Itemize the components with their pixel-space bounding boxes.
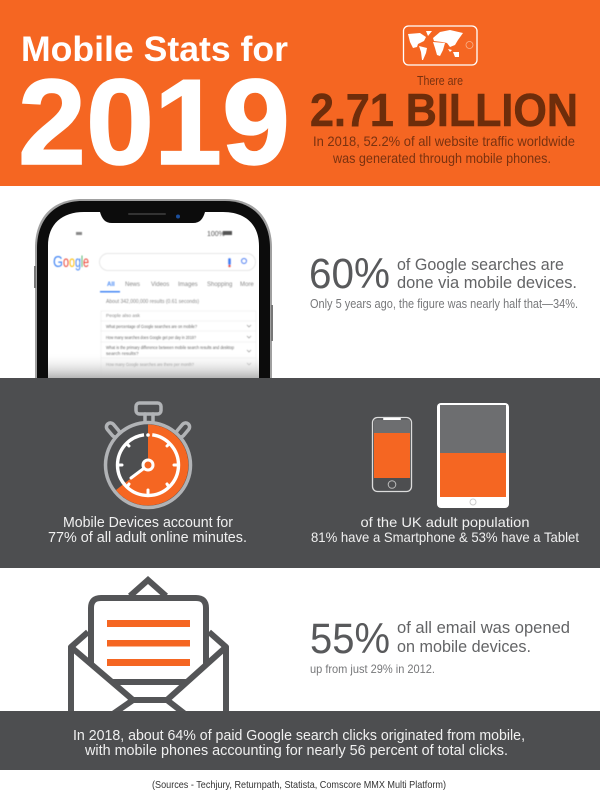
icon: smartphone (372, 418, 412, 492)
search box (100, 254, 256, 270)
text: paid search statistic: In 2018, about 64% of paid Google search clicks originated from mobile, (73, 728, 525, 744)
google logo: G (53, 254, 63, 271)
google logo (53, 254, 89, 271)
text: sources: (Sources - Techjury, Returnpath, Statista, Comscore MMX Multi Platform) (152, 779, 446, 791)
people also ask (101, 311, 256, 378)
stat: 60 percent: 60% (309, 250, 390, 298)
people also ask: What percentage of Google searches are on mobile? (106, 324, 197, 330)
text: uk adult population: of the UK adult population (360, 514, 530, 530)
people also ask: How many Google searches are there per month? (106, 362, 194, 368)
google logo: g (75, 254, 81, 271)
icon: world map on phone (404, 26, 477, 65)
text: website traffic (313, 133, 575, 166)
tabs: Shopping (207, 282, 232, 288)
google logo: l (81, 254, 83, 271)
tabs: News (125, 282, 140, 288)
stat: 55 percent: 55% (310, 615, 390, 663)
tabs: More (240, 282, 254, 288)
google logo: o (63, 254, 69, 271)
text: there are: There are (417, 74, 463, 88)
text: google searches: done via mobile devices. (397, 273, 577, 292)
google screen (53, 231, 256, 378)
google logo: o (69, 254, 75, 271)
icon: envelope (71, 580, 226, 714)
panel: google search on phone (34, 199, 578, 378)
tabs (107, 282, 254, 288)
people also ask: search results? (106, 351, 139, 357)
text: email opened (397, 619, 570, 656)
text: up from 29 percent: up from just 29% in 2012. (310, 662, 435, 676)
text: paid search statistic (73, 728, 525, 759)
text: website traffic: was generated through mobile phones. (332, 150, 551, 166)
text: google searches: of Google searches are (397, 255, 564, 274)
google screen: About 342,000,000 results (0.61 seconds) (106, 299, 199, 305)
text: uk adult population: 81% have a Smartphone & 53% have a Tablet (311, 529, 579, 545)
people also ask: People also ask (106, 313, 140, 319)
text: adult online minutes: 77% of all adult online minutes. (48, 530, 247, 546)
icon: tablet (437, 403, 509, 508)
text: adult online minutes (48, 515, 247, 546)
tabs: All (107, 282, 115, 288)
text: email opened: on mobile devices. (397, 638, 531, 656)
title: Mobile Stats for: Mobile Stats for (21, 30, 288, 69)
people also ask: How many searches does Google get per day in 2019? (106, 335, 196, 341)
phone illustration (34, 199, 273, 378)
text: google searches (397, 255, 577, 292)
google logo: e (83, 254, 89, 271)
stat: 2.71 billion: 2.71 BILLION (310, 84, 578, 136)
tabs: Videos (151, 282, 169, 288)
people also ask: What is the primary difference between mobile search results and desktop (106, 345, 234, 351)
text: website traffic: In 2018, 52.2% of all website traffic worldwide (313, 133, 575, 149)
text: adult online minutes: Mobile Devices account for (63, 515, 233, 531)
text: uk adult population (311, 514, 579, 545)
text: email opened: of all email was opened (397, 619, 570, 637)
title: year 2019: 2019 (18, 54, 290, 190)
panel: paid search clicks (0, 711, 600, 770)
panel: email (71, 580, 570, 714)
tabs: Images (178, 282, 198, 288)
panel: header (0, 0, 600, 190)
icon: stopwatch (105, 403, 191, 508)
text: paid search statistic: with mobile phones accounting for nearly 56 percent of total clicks. (84, 743, 508, 759)
google screen: 100% (207, 231, 225, 238)
panel: dark stats band (0, 378, 600, 568)
